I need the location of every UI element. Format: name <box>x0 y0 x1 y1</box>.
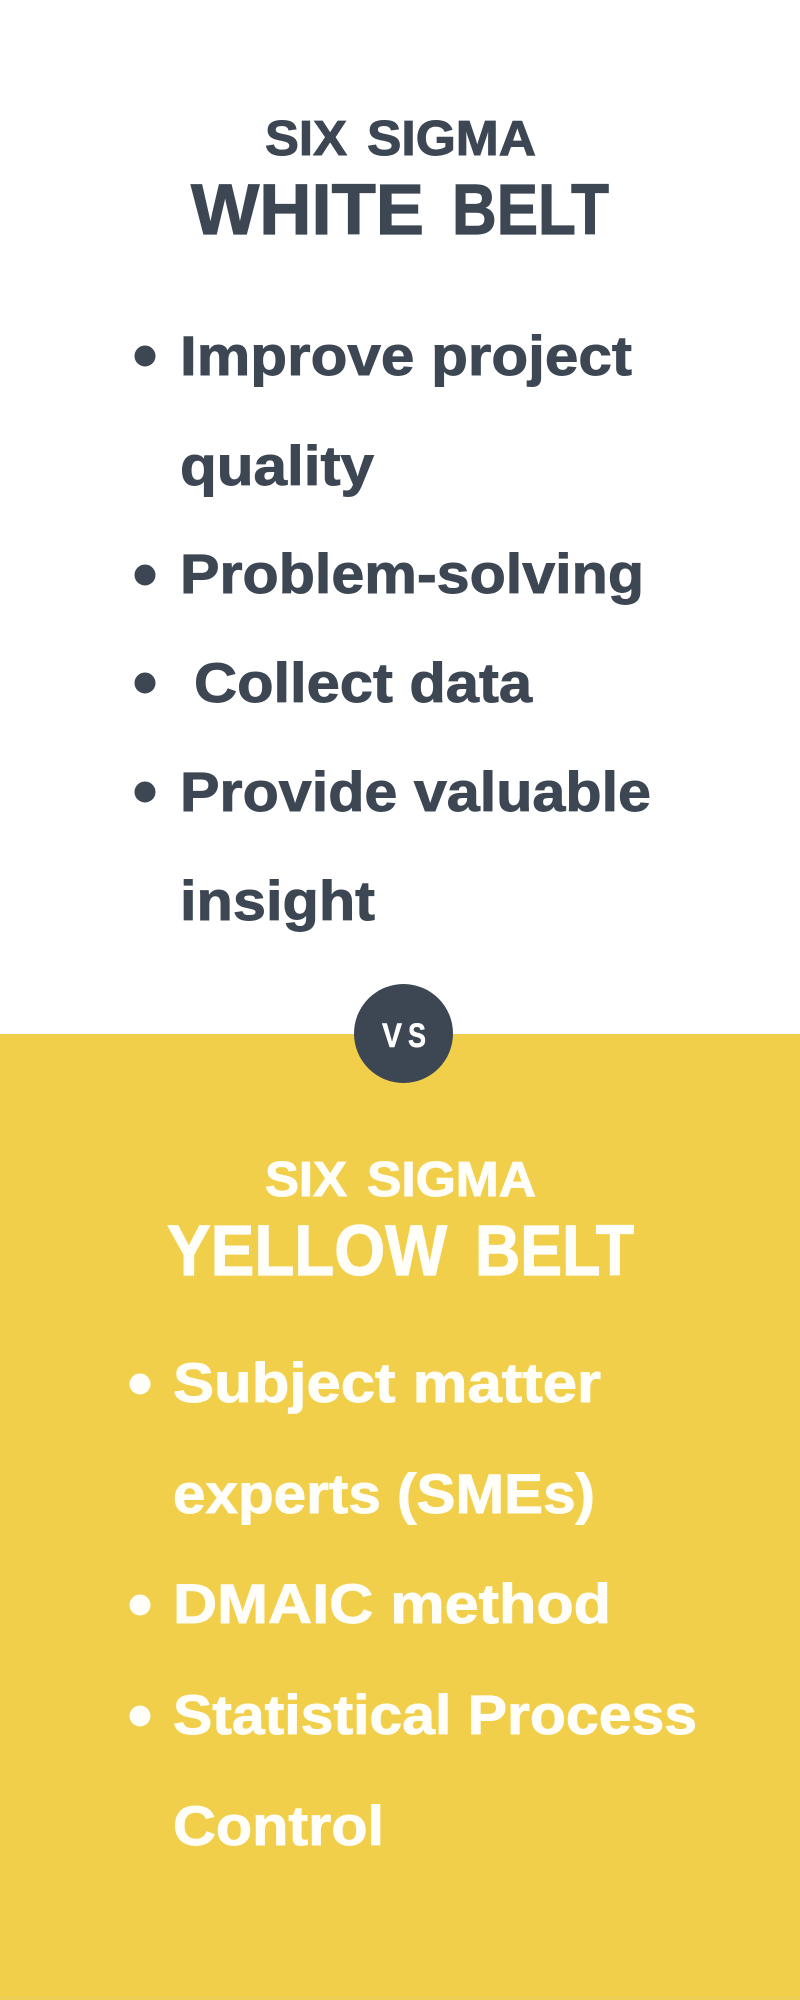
list: yellow belt skills <box>130 1351 697 1857</box>
list: white belt skills: Problem-solving <box>180 542 644 605</box>
badge: vs <box>354 984 453 1083</box>
heading: six sigma yellow belt: BELT <box>475 1212 634 1291</box>
list: white belt skills: insight <box>180 869 375 932</box>
list: white belt skills: quality <box>180 434 374 497</box>
list: white belt skills: Provide valuable <box>180 760 651 823</box>
heading: six sigma yellow belt: YELLOW <box>167 1212 447 1291</box>
list: white belt skills: Improve project <box>180 324 632 387</box>
list: yellow belt skills: experts (SMEs) <box>173 1462 595 1525</box>
list: yellow belt skills: DMAIC method <box>173 1572 611 1635</box>
list: yellow belt skills: Subject matter <box>173 1351 601 1414</box>
heading: six sigma white belt: WHITE <box>191 171 424 250</box>
badge: vs: S <box>408 1017 426 1055</box>
heading: six sigma yellow belt <box>167 1153 634 1291</box>
list: white belt skills: Collect data <box>194 651 533 714</box>
badge: vs: V <box>382 1017 402 1055</box>
heading: six sigma white belt: BELT <box>452 171 609 250</box>
heading: six sigma white belt: SIGMA <box>367 112 536 166</box>
panel: white belt <box>135 112 651 932</box>
heading: six sigma yellow belt: SIGMA <box>367 1153 536 1207</box>
list: yellow belt skills: Statistical Process <box>173 1683 697 1746</box>
heading: six sigma white belt <box>191 112 609 250</box>
list: yellow belt skills: Control <box>173 1794 384 1857</box>
panel: yellow belt <box>130 1153 697 1857</box>
list: white belt skills <box>135 324 651 932</box>
panel: yellow belt background <box>0 1034 800 2000</box>
heading: six sigma yellow belt: SIX <box>265 1153 347 1207</box>
heading: six sigma white belt: SIX <box>265 112 347 166</box>
